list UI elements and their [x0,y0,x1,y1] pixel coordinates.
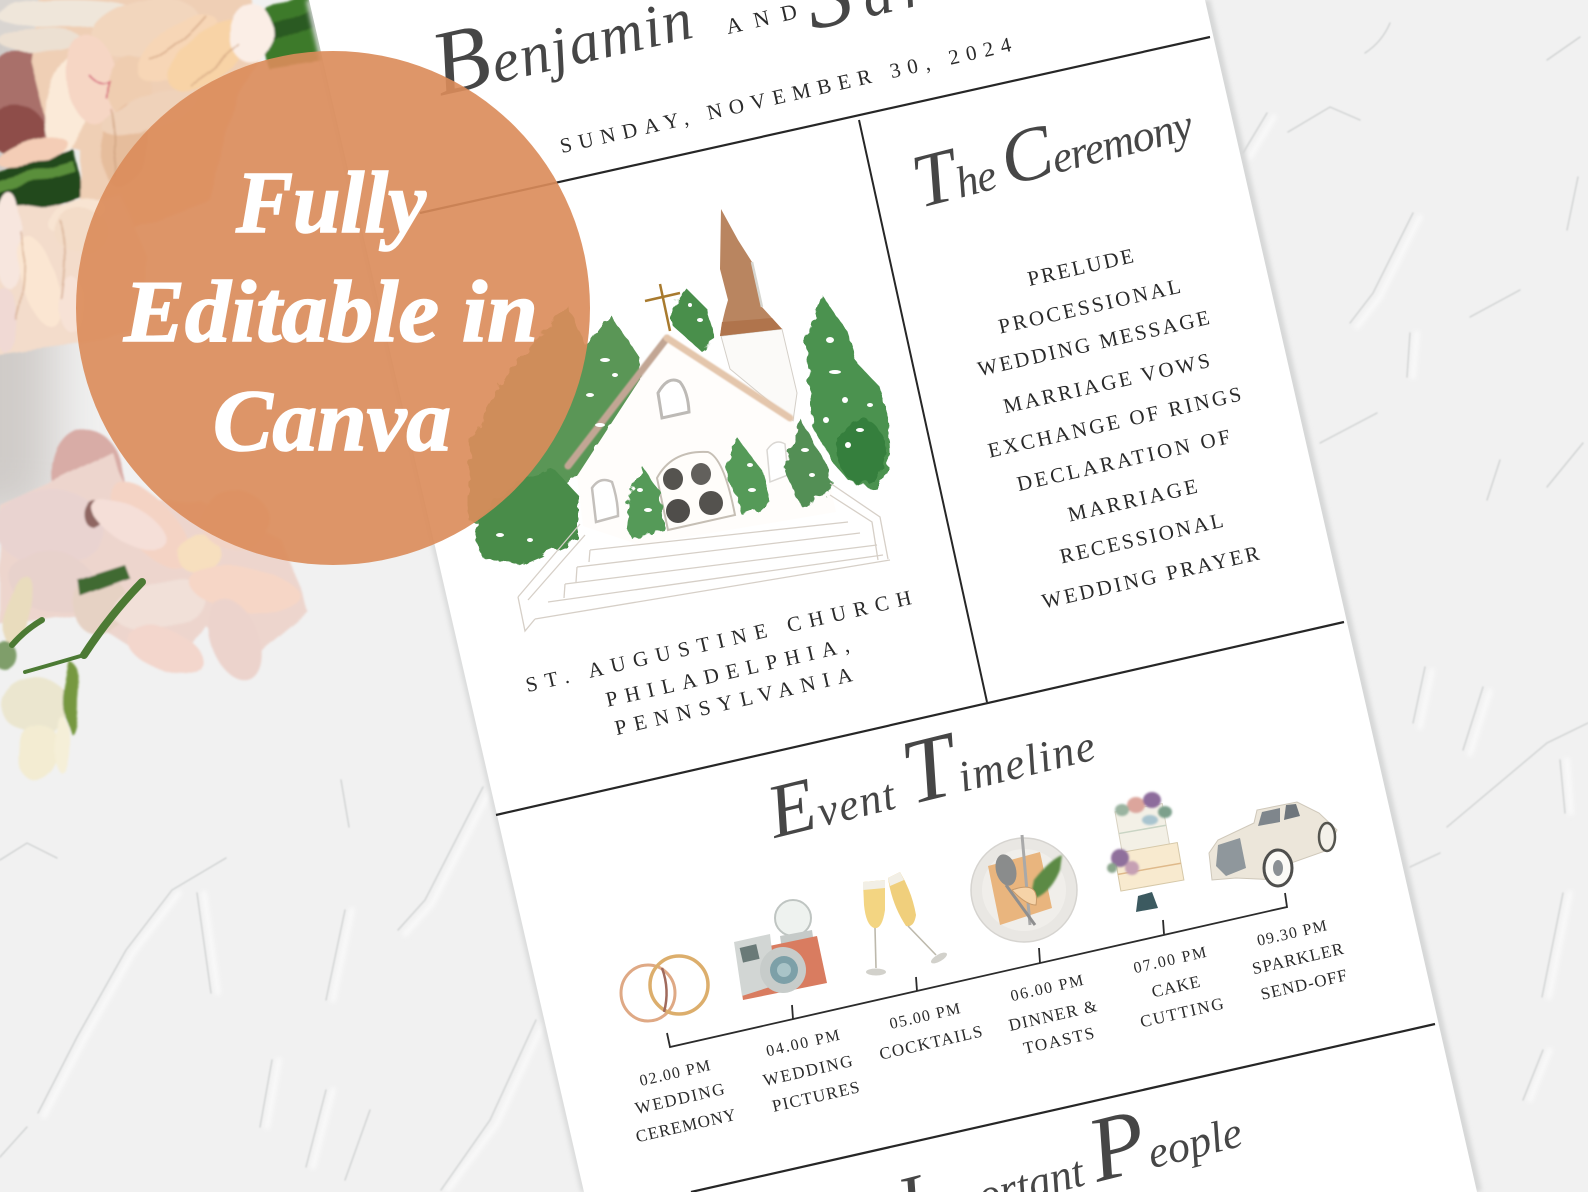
flowers: bottom left pink blossoms [0,423,308,784]
illustration: watercolor church [468,209,890,631]
timeline item: 05.00 PM cocktails: COCKTAILS [877,1022,984,1064]
bottom left tree [474,470,578,565]
badge text: Canva [213,373,451,470]
icon: wedding rings [621,956,708,1021]
icon: vintage car [1209,802,1337,886]
white flecks in foliage [496,303,873,542]
timeline item: 04.00 PM wedding pictures [761,1027,861,1116]
icon: champagne flutes [863,872,949,976]
stairs [518,483,890,631]
icon: wedding cake [1107,792,1184,912]
timeline item: 02.00 PM wedding ceremony: 02.00 PM [638,1057,712,1090]
divider lines [420,37,1435,1192]
timeline item: 09.30 PM sparkler send-off: SEND-OFF [1259,966,1349,1004]
timeline item: 09.30 PM sparkler send-off: SPARKLER [1250,939,1346,978]
cross [645,284,680,331]
front trees [625,418,832,537]
timeline item: 07.00 PM cake cutting [1132,944,1225,1031]
timeline item: 02.00 PM wedding ceremony: CEREMONY [634,1105,738,1146]
timeline item: 09.30 PM sparkler send-off: 09.30 PM [1255,917,1328,950]
ceremony order list [975,244,1261,613]
program paper sheet [309,0,1477,1192]
timeline item: 05.00 PM cocktails [877,1000,984,1064]
flowers: top left bouquet [0,0,334,355]
timeline item: 02.00 PM wedding ceremony: WEDDING [633,1079,726,1118]
roof [568,338,790,466]
tower [720,209,797,421]
ceremony order list: EXCHANGE OF RINGS [986,382,1243,463]
church address: PHILADELPHIA, [603,633,851,712]
upper arched window [658,380,689,418]
timeline item: 06.00 PM dinner and toasts [1007,972,1099,1058]
badge: orange circle [76,51,590,565]
ceremony order list: WEDDING MESSAGE [975,305,1212,381]
church address: ST. AUGUSTINE CHURCH [523,585,914,697]
badge text: Editable in [123,264,538,361]
timeline item: 06.00 PM dinner and toasts: 06.00 PM [1009,972,1085,1005]
badge text [123,155,538,470]
timeline item: 06.00 PM dinner and toasts: TOASTS [1022,1023,1096,1058]
left background tree [468,305,642,530]
gray shadow behind flowers [0,0,55,520]
date line: SUNDAY, NOVEMBER 30, 2024 [558,32,1014,158]
timeline bracket with ticks [667,893,1287,1047]
right tall tree [806,295,890,490]
left arched window [592,480,618,522]
ceremony order list: RECESSIONAL [1057,508,1226,568]
ceremony order list: WEDDING PRAYER [1040,541,1261,613]
timeline item: 04.00 PM wedding pictures: WEDDING [761,1051,854,1090]
timeline item: 02.00 PM wedding ceremony [633,1057,738,1146]
small tree behind cross [672,288,716,350]
ceremony order list: MARRIAGE [1065,474,1199,526]
event timeline heading: Event Timeline [754,679,1102,858]
ceremony order list: PRELUDE [1025,244,1136,291]
church address: PENNSYLVANIA [612,662,855,740]
timeline item: 04.00 PM wedding pictures: 04.00 PM [765,1027,841,1060]
paper edge shadow [309,0,1477,1192]
door with four dark panes [657,452,735,530]
ceremony order list: PROCESSIONAL [996,274,1183,338]
church building [577,338,836,545]
ceremony heading: The Ceremony [903,73,1200,224]
right arched window [767,442,788,482]
timeline item: 05.00 PM cocktails: 05.00 PM [888,1000,962,1033]
badge text: Fully [235,155,427,252]
icon: camera [734,900,827,1000]
timeline item: 04.00 PM wedding pictures: PICTURES [770,1077,861,1116]
flower stems [12,582,142,672]
timeline item: 07.00 PM cake cutting: CAKE [1150,972,1202,1001]
timeline item: 09.30 PM sparkler send-off [1250,917,1349,1004]
timeline item: 07.00 PM cake cutting: CUTTING [1138,994,1225,1031]
ceremony order list: MARRIAGE VOWS [1001,348,1212,418]
timeline item: 06.00 PM dinner and toasts: DINNER & [1007,996,1099,1035]
icon: dinner plate [971,835,1077,942]
timeline item: 07.00 PM cake cutting: 07.00 PM [1132,944,1208,977]
couple names heading [422,0,1011,115]
ceremony order list: DECLARATION OF [1014,424,1232,496]
